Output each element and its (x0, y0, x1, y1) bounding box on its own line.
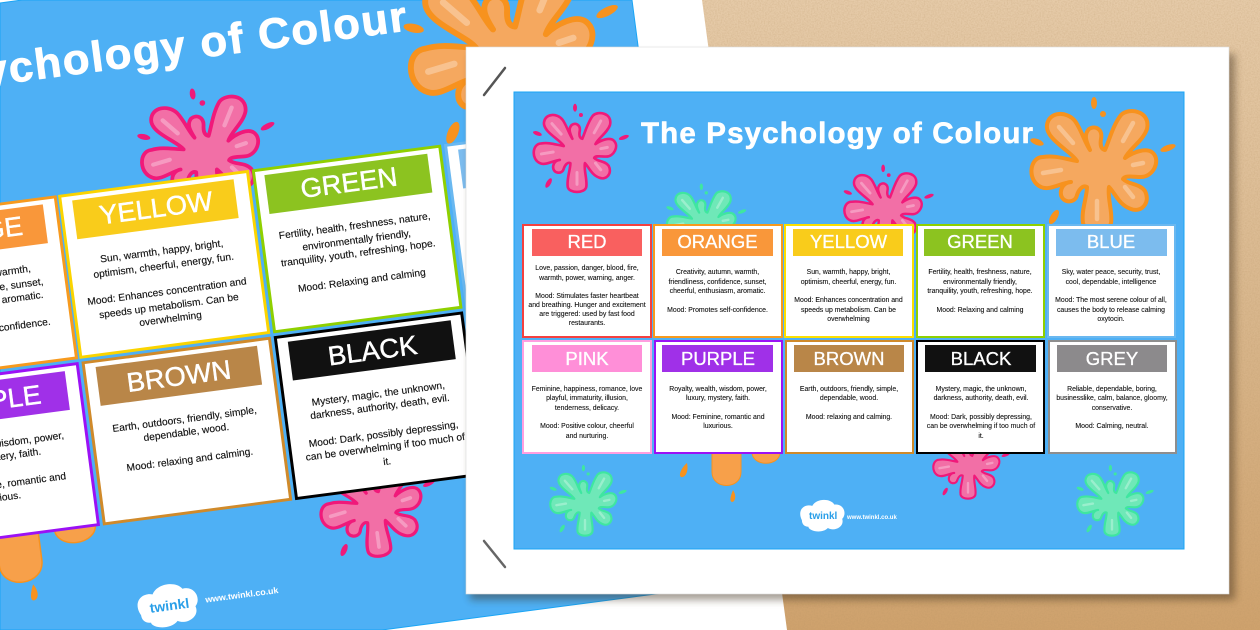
card: grey: Mood: Calming, neutral. (1075, 423, 1149, 430)
card: black: it. (978, 433, 984, 440)
back twinkl logo: twinkl (149, 595, 190, 616)
card: orange: ORANGE (677, 231, 758, 252)
back card: brown: dependable, wood. (143, 422, 230, 444)
card: blue: Sky, water peace, security, trust, (1062, 269, 1160, 276)
back card: yellow: Sun, warmth, happy, bright, (100, 238, 224, 265)
card: grey (1049, 341, 1176, 453)
card: grey: GREY (1086, 348, 1138, 369)
front poster shadow (470, 54, 1235, 600)
back card: green: tranquility, youth, refreshing, hope. (280, 238, 436, 269)
card: pink: and nurturing. (566, 433, 608, 440)
front poster (466, 47, 1229, 594)
card: yellow: overwhelming (827, 316, 870, 323)
card: purple: luxury, mystery, faith. (686, 395, 750, 402)
splat: pink top left (532, 104, 629, 192)
splat: pink bottom (932, 428, 1010, 499)
card: grey: Reliable, dependable, boring, (1067, 386, 1157, 393)
splat: green bottom left (549, 465, 627, 536)
splat: green behind orange card (666, 184, 747, 257)
back card: green: Fertility, health, freshness, nature, (278, 211, 431, 242)
card: green: Fertility, health, freshness, nature, (928, 269, 1032, 276)
card: green: tranquility, youth, refreshing, hope. (927, 288, 1033, 295)
back card: green (253, 146, 461, 332)
back twinkl logo (135, 570, 281, 630)
card: pink (523, 341, 651, 453)
card: pink: PINK (565, 348, 609, 369)
card: red: Mood: Stimulates faster heartbeat (535, 293, 639, 300)
back card: brown: Mood: relaxing and calming. (126, 447, 254, 474)
card: brown: dependable, wood. (820, 395, 878, 402)
back poster white sheet (0, 0, 787, 630)
card: yellow: optimism, cheerful, energy, fun. (801, 279, 896, 286)
splat: orange top right (1029, 97, 1177, 231)
card: blue: cool, dependable, intelligence (1066, 279, 1157, 286)
back card: yellow: speeds up metabolism. Can be (99, 292, 240, 321)
back card: orange (0, 197, 76, 383)
splat: green bottom right (1076, 465, 1154, 536)
back poster blue panel (0, 0, 709, 630)
card: red: Love, passion, danger, blood, fire, (535, 265, 639, 272)
card: brown: BROWN (814, 348, 884, 369)
card: purple (655, 341, 782, 453)
back poster (tilted) (0, 0, 692, 630)
card: orange: Mood: Promotes self-confidence. (667, 307, 768, 314)
card: purple: PURPLE (681, 348, 755, 369)
card: pink: playful, immaturity, illusion, (546, 395, 628, 402)
card: black: Mystery, magic, the unknown, (936, 386, 1026, 393)
card: brown (786, 341, 913, 453)
card: red: warmth, power, warning, anger. (538, 275, 635, 282)
splat: pink behind yellow card (843, 165, 934, 247)
card: orange: Creativity, autumn, warmth, (676, 269, 759, 276)
back card: brown: BROWN (125, 354, 233, 398)
card: grey: conservative. (1092, 405, 1132, 412)
card: red: are triggered: used by fast food (539, 311, 635, 318)
front poster blue panel (514, 92, 1184, 549)
card: red: RED (567, 231, 607, 252)
back card: yellow (60, 172, 269, 357)
back card: yellow: optimism, cheerful, energy, fun. (93, 252, 235, 281)
twinkl logo and url (800, 500, 897, 531)
front poster corner slit bottom (484, 541, 505, 567)
card: red: and breathing. Hunger and excitement (528, 302, 646, 309)
back card: black: BLACK (326, 329, 419, 371)
card: pink: Mood: Positive colour, cheerful (540, 423, 634, 430)
card: purple: luxurious. (703, 423, 733, 430)
back card: green: Mood: Relaxing and calming (297, 267, 426, 295)
card: green (917, 225, 1044, 337)
back card: black: can be overwhelming if too much of (305, 432, 466, 464)
card: yellow (785, 225, 913, 337)
back card: yellow: Mood: Enhances concentration and (87, 276, 247, 308)
back card: black: it. (383, 456, 392, 468)
front poster white sheet (466, 47, 1229, 594)
card: grey: businesslike, calm, balance, gloomy, (1056, 395, 1168, 402)
back poster splats (0, 0, 686, 606)
card: red: restaurants. (569, 320, 605, 327)
card: yellow: YELLOW (810, 231, 888, 252)
card: yellow: speeds up metabolism. Can be (801, 307, 896, 314)
back twinkl logo: www.twinkl.co.uk (204, 585, 279, 605)
card: orange: cheerful, enthusiasm, aromatic. (670, 288, 765, 295)
twinkl logo and url: twinkl (809, 511, 838, 522)
card: green: environmentally friendly, (943, 279, 1017, 286)
card: green: GREEN (947, 231, 1013, 252)
back card: green: environmentally friendly, (302, 228, 411, 253)
card: purple: Royalty, wealth, wisdom, power, (669, 386, 767, 393)
back card: yellow: YELLOW (97, 185, 215, 230)
card: black: darkness, authority, death, evil. (934, 395, 1029, 402)
back card: green: GREEN (299, 161, 399, 204)
card: blue: Mood: The most serene colour of all, (1055, 297, 1167, 304)
card: red (523, 225, 651, 337)
card: brown: Earth, outdoors, friendly, simple, (800, 386, 898, 393)
back card: purple (0, 364, 98, 549)
card: blue: causes the body to release calming (1057, 307, 1165, 314)
back card: blue (446, 121, 653, 306)
back card: brown: Earth, outdoors, friendly, simple, (112, 405, 257, 435)
card: brown: Mood: relaxing and calming. (806, 414, 892, 421)
back card: brown (83, 338, 291, 524)
card: black: can be overwhelming if too much of (927, 423, 1035, 430)
card: blue: BLUE (1087, 231, 1135, 252)
card: black (917, 341, 1044, 453)
card: pink: tenderness, delicacy. (555, 405, 619, 412)
orange paint drips (680, 440, 780, 502)
twinkl logo and url: www.twinkl.co.uk (846, 515, 897, 521)
back card: black (275, 313, 483, 499)
back card: black: darkness, authority, death, evil. (310, 393, 450, 422)
card: purple: Mood: Feminine, romantic and (671, 414, 765, 421)
card: yellow: Sun, warmth, happy, bright, (807, 269, 890, 276)
card: black: BLACK (951, 348, 1012, 369)
title: The Psychology of Colour (641, 117, 1034, 150)
back card: yellow: overwhelming (139, 310, 203, 329)
back card: black: Mood: Dark, possibly depressing, (308, 420, 459, 450)
card: black: Mood: Dark, possibly depressing, (930, 414, 1032, 421)
card: orange: friendliness, confidence, sunset, (668, 279, 767, 286)
front poster corner slit top (484, 68, 505, 95)
back card: black: Mystery, magic, the unknown, (311, 380, 446, 409)
card: blue: oxytocin. (1097, 316, 1125, 323)
card: green: Mood: Relaxing and calming (937, 307, 1024, 314)
card: orange (654, 225, 782, 337)
card: blue (1048, 225, 1175, 337)
card: yellow: Mood: Enhances concentration and (794, 297, 903, 304)
back card: blue: BLUE (504, 137, 579, 177)
card: pink: Feminine, happiness, romance, love (532, 386, 643, 393)
